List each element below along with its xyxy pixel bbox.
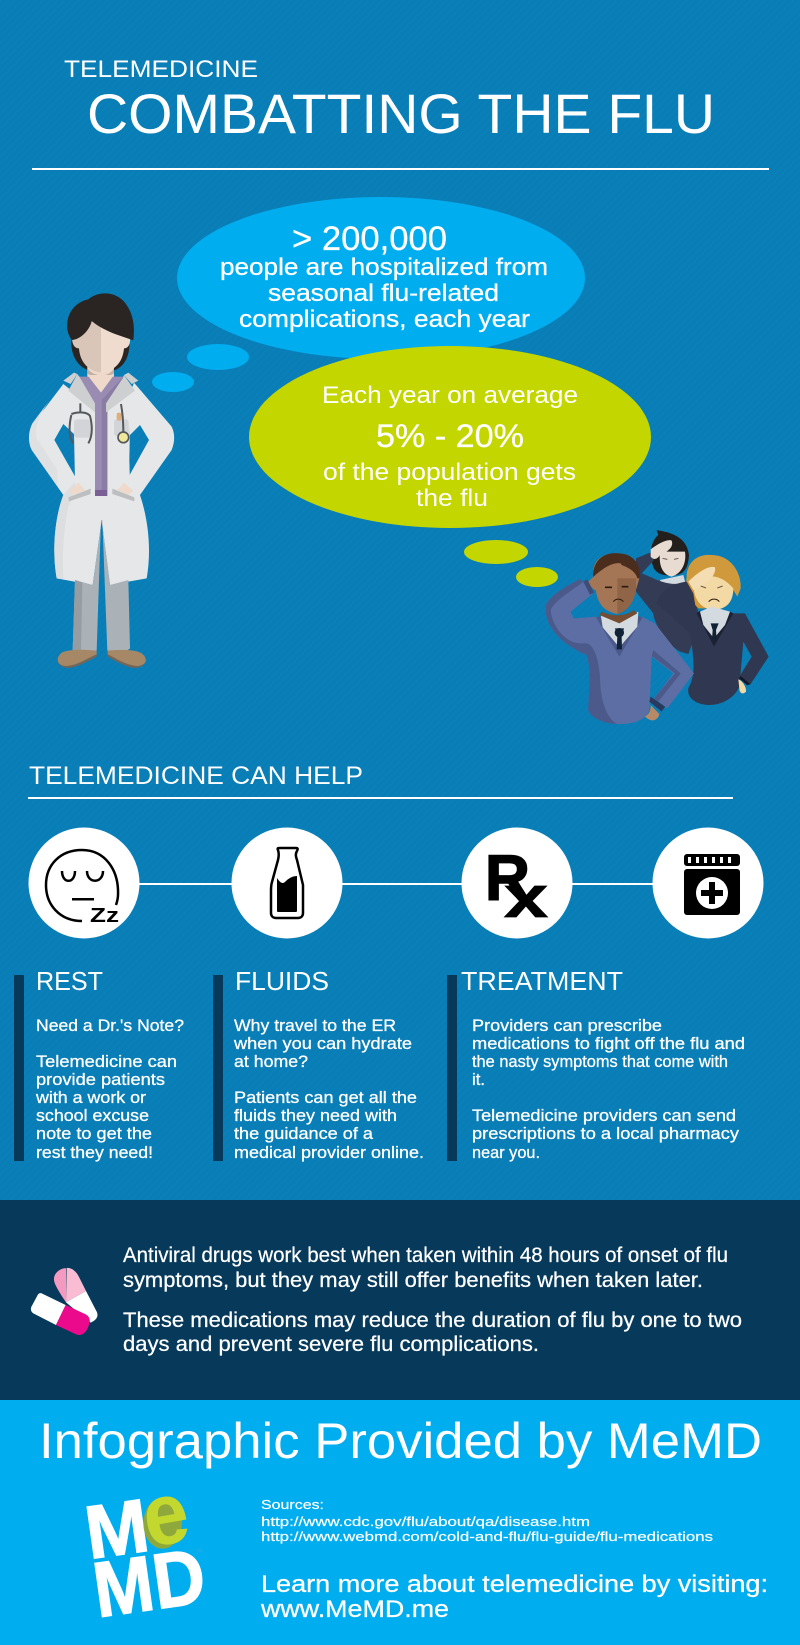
panel: rest: REST — [36, 966, 103, 996]
title: TELEMEDICINE — [64, 56, 258, 83]
icon: rest face: Zz — [90, 905, 119, 927]
panel: treatment: Providers can prescribe — [472, 1016, 662, 1035]
illustration: doctor — [29, 293, 174, 668]
panel: fluids: the guidance of a — [234, 1124, 374, 1143]
panel: rest: note to get the — [36, 1124, 152, 1143]
icon: Rx symbol: R — [485, 842, 530, 914]
thought bubble: population statistic: of the population gets — [323, 459, 576, 486]
sources: http://www.webmd.com/cold-and-flu/flu-guide/flu-medications — [261, 1529, 714, 1544]
icon: milk bottle — [232, 828, 342, 938]
thought bubble: population statistic: Each year on average — [322, 382, 578, 409]
panel: rest: provide patients — [36, 1070, 165, 1089]
logo: MeMD: M — [80, 1483, 154, 1575]
thought bubble: population statistic: the flu — [416, 485, 488, 512]
panel: fluids: Patients can get all the — [234, 1088, 417, 1107]
panel: treatment: prescriptions to a local pharmacy — [472, 1124, 740, 1143]
title: COMBATTING THE FLU — [87, 82, 715, 145]
footer heading: Infographic Provided by MeMD — [39, 1413, 762, 1469]
icon: pills — [31, 1268, 97, 1335]
icon: rest face — [28, 828, 140, 938]
panel: antiviral drugs: Antiviral drugs work best when taken within 48 hours of onset of flu — [123, 1244, 728, 1267]
panel: treatment: Telemedicine providers can send — [472, 1106, 736, 1125]
panel: fluids: medical provider online. — [234, 1143, 424, 1162]
panel: fluids: fluids they need with — [234, 1106, 397, 1125]
thought bubble: hospitalized statistic: complications, each year — [239, 306, 530, 333]
panel: antiviral drugs — [0, 1200, 800, 1400]
illustration: sick people — [546, 530, 769, 724]
sources — [261, 1497, 714, 1544]
panel: antiviral drugs: days and prevent severe flu complications. — [123, 1333, 539, 1356]
call to action — [260, 1571, 768, 1623]
panel: treatment — [447, 966, 745, 1162]
section heading: telemedicine can help: TELEMEDICINE CAN HELP — [29, 762, 363, 790]
call to action: Learn more about telemedicine by visiting: — [261, 1571, 768, 1598]
panel: rest: with a work or — [35, 1088, 146, 1107]
thought bubble: hospitalized statistic: people are hospitalized from — [220, 254, 548, 281]
sources: Sources: — [261, 1497, 324, 1512]
panel: antiviral drugs: These medications may reduce the duration of flu by one to two — [123, 1309, 742, 1332]
title — [64, 56, 715, 145]
logo: MeMD: TM — [196, 1548, 203, 1553]
panel: rest: rest they need! — [36, 1143, 153, 1162]
panel: rest — [14, 966, 184, 1162]
panel: treatment: it. — [472, 1070, 485, 1089]
panel: treatment: the nasty symptoms that come with — [472, 1052, 728, 1071]
thought bubble: population statistic — [249, 346, 651, 587]
icon: Rx symbol — [462, 828, 572, 938]
panel: antiviral drugs: symptoms, but they may still offer benefits when taken later. — [123, 1269, 703, 1292]
logo: MeMD: MD — [88, 1531, 211, 1634]
logo: MeMD — [80, 1462, 211, 1634]
icon: Rx symbol: x — [504, 865, 548, 930]
panel: fluids: FLUIDS — [235, 966, 329, 996]
panel: rest: Telemedicine can — [36, 1052, 177, 1071]
panel: rest: school excuse — [36, 1106, 149, 1125]
panel: fluids — [213, 966, 424, 1162]
panel: fluids: Why travel to the ER — [234, 1016, 396, 1035]
panel: treatment: medications to fight off the flu and — [472, 1034, 745, 1053]
panel: treatment: near you. — [472, 1143, 540, 1162]
thought bubble: hospitalized statistic — [152, 197, 585, 392]
thought bubble: population statistic: 5% - 20% — [376, 418, 524, 454]
icon: medicine jar — [652, 828, 764, 938]
panel: rest: Need a Dr.'s Note? — [36, 1016, 184, 1035]
thought bubble: hospitalized statistic: > 200,000 — [292, 220, 447, 258]
panel: treatment: TREATMENT — [461, 966, 623, 996]
panel: fluids: when you can hydrate — [233, 1034, 412, 1053]
logo: MeMD: e — [135, 1462, 196, 1566]
sources: http://www.cdc.gov/flu/about/qa/disease.htm — [261, 1514, 590, 1529]
panel: fluids: at home? — [234, 1052, 308, 1071]
thought bubble: hospitalized statistic: seasonal flu-related — [268, 280, 499, 307]
panel: footer — [0, 1400, 800, 1645]
call to action: www.MeMD.me — [260, 1596, 449, 1623]
